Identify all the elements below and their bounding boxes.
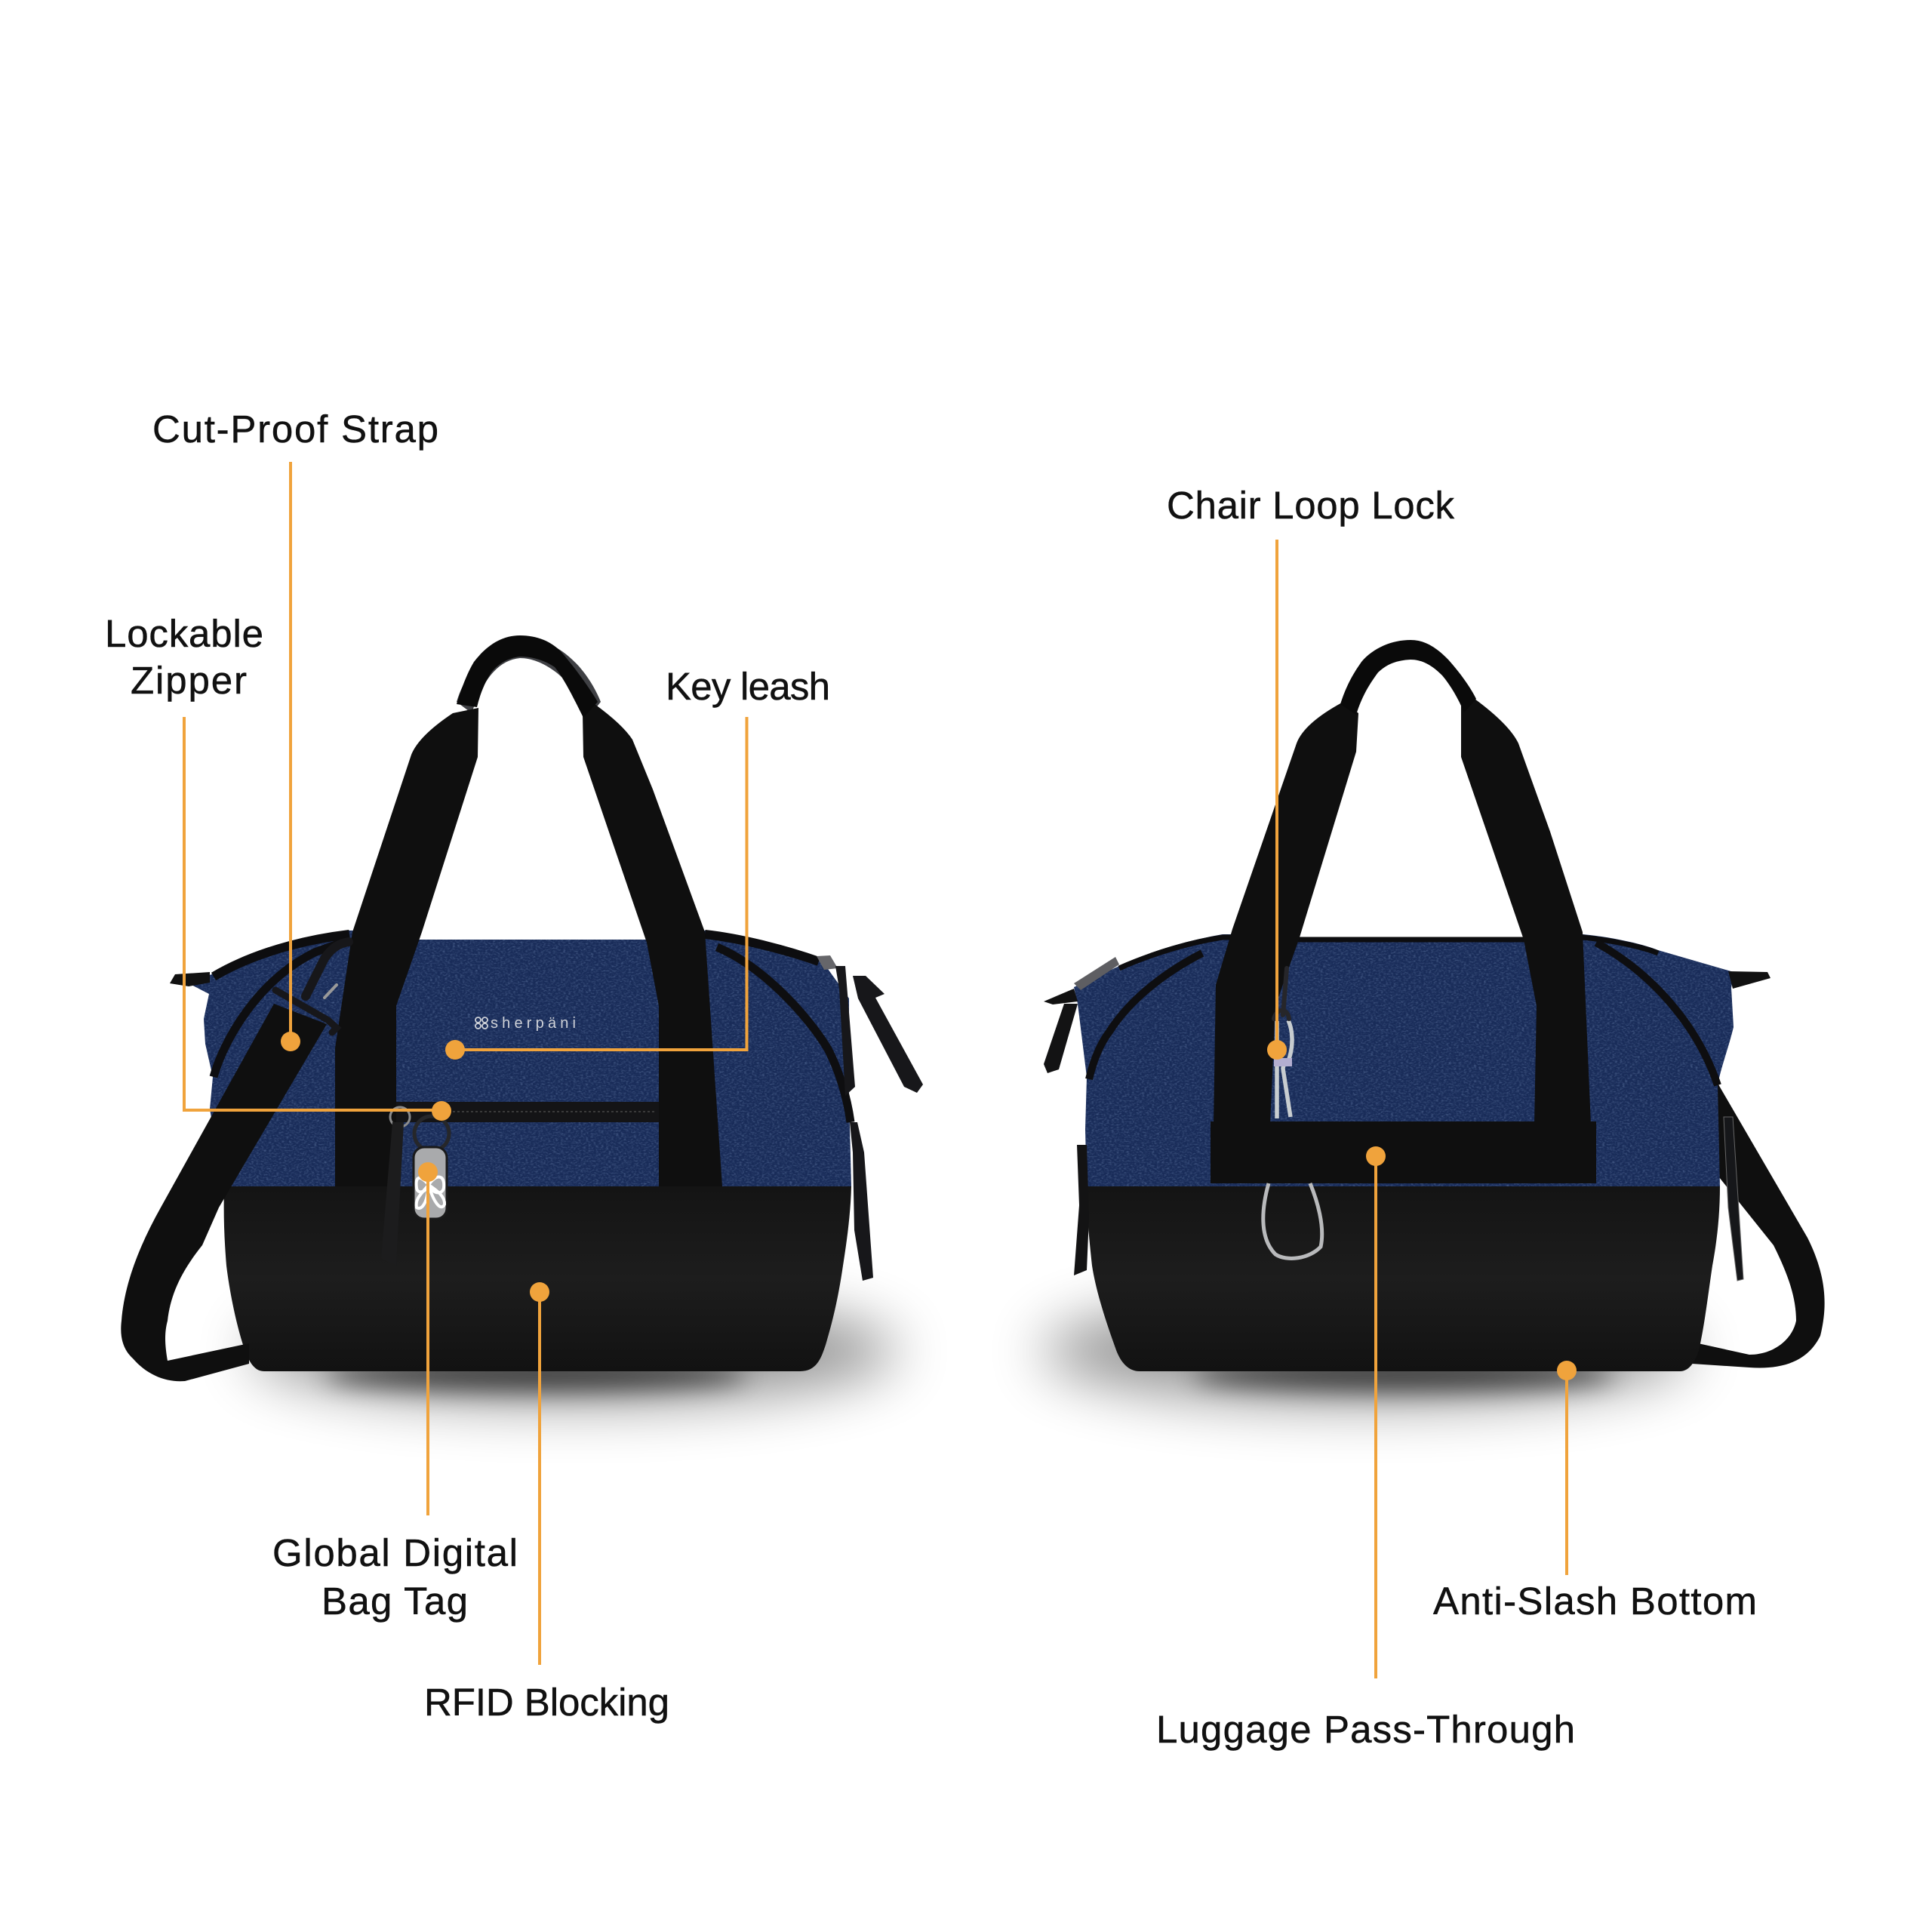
callout: RFID Blocking: RFID Blocking	[424, 1681, 669, 1724]
left bag top zip pulls	[817, 955, 923, 1096]
left bag shoulder strap	[121, 1004, 327, 1381]
right bag right side zip pull	[1724, 1117, 1743, 1281]
right bag chair loop cord	[1274, 1020, 1292, 1118]
right bag fabric texture	[1074, 934, 1734, 1186]
right bag left strap	[1214, 702, 1358, 1124]
bag tag	[414, 1116, 449, 1219]
callout: Chair Loop Lock	[1167, 484, 1455, 1060]
callout: Lockable Zipper	[105, 612, 451, 1121]
left bag zip pocket	[396, 1102, 659, 1122]
left bag side zip pull	[850, 1122, 873, 1281]
left bag left strap	[335, 708, 478, 1186]
right bag right strap	[1461, 699, 1591, 1124]
left bag fabric texture	[189, 931, 851, 1186]
left bag front zip pull	[381, 1107, 410, 1266]
right bag left zip pulls	[1044, 1004, 1089, 1275]
callout: Luggage Pass-Through: Luggage Pass-Through	[1156, 1708, 1575, 1751]
left bag end tab	[170, 972, 210, 986]
callout: Luggage Pass-Through	[1156, 1146, 1575, 1751]
left bag floor shadow	[249, 1298, 898, 1404]
sherpani logo: sherpäni	[491, 1015, 576, 1032]
left bag handle sheen	[457, 638, 601, 717]
callout: Lockable Zipper: Lockable	[105, 612, 263, 655]
left bag handle top	[457, 635, 598, 718]
right bag top zip edge	[1119, 937, 1658, 968]
right bag	[1041, 640, 1825, 1404]
callout: Lockable Zipper: Zipper	[131, 659, 247, 702]
callout: Chair Loop Lock: Chair Loop Lock	[1167, 484, 1455, 527]
callout: Key leash	[445, 665, 830, 1060]
right bag luggage pass-through band	[1211, 1121, 1596, 1183]
left bag black base	[224, 1186, 851, 1371]
left bag strap buckle	[275, 942, 349, 1032]
callout: Cut-Proof Strap: Cut-Proof Strap	[152, 408, 438, 451]
left bag top zip edge	[214, 934, 819, 977]
right bag elastic loop	[1263, 1183, 1322, 1258]
callout: Anti-Slash Bottom: Anti-Slash Bottom	[1433, 1580, 1757, 1623]
right bag handle top	[1340, 640, 1476, 715]
right bag zip sliders	[1074, 957, 1119, 990]
callout: Cut-Proof Strap	[152, 408, 438, 1051]
left bag curved pocket zips	[214, 943, 851, 1122]
callout: Global Digital Bag Tag	[272, 1162, 518, 1623]
callout: Global Digital Bag Tag: Bag Tag	[321, 1580, 468, 1623]
left bag right strap	[583, 704, 722, 1186]
callout: Key leash: Key leash	[666, 665, 830, 708]
callout: Anti-Slash Bottom	[1433, 1361, 1757, 1623]
right bag curved pocket zips	[1089, 943, 1718, 1085]
right bag floor shadow	[1041, 1298, 1690, 1404]
right bag black base	[1087, 1186, 1720, 1371]
right bag shoulder strap	[1692, 1075, 1825, 1368]
callout: RFID Blocking	[424, 1282, 669, 1724]
right bag blue upper body	[1074, 934, 1734, 1186]
left bag blue upper body	[189, 931, 851, 1186]
right bag end tabs	[1044, 971, 1770, 1004]
callout: Global Digital Bag Tag: Global Digital	[272, 1531, 518, 1574]
left bag	[121, 635, 923, 1404]
right bag lobster clasp	[1274, 968, 1289, 1019]
